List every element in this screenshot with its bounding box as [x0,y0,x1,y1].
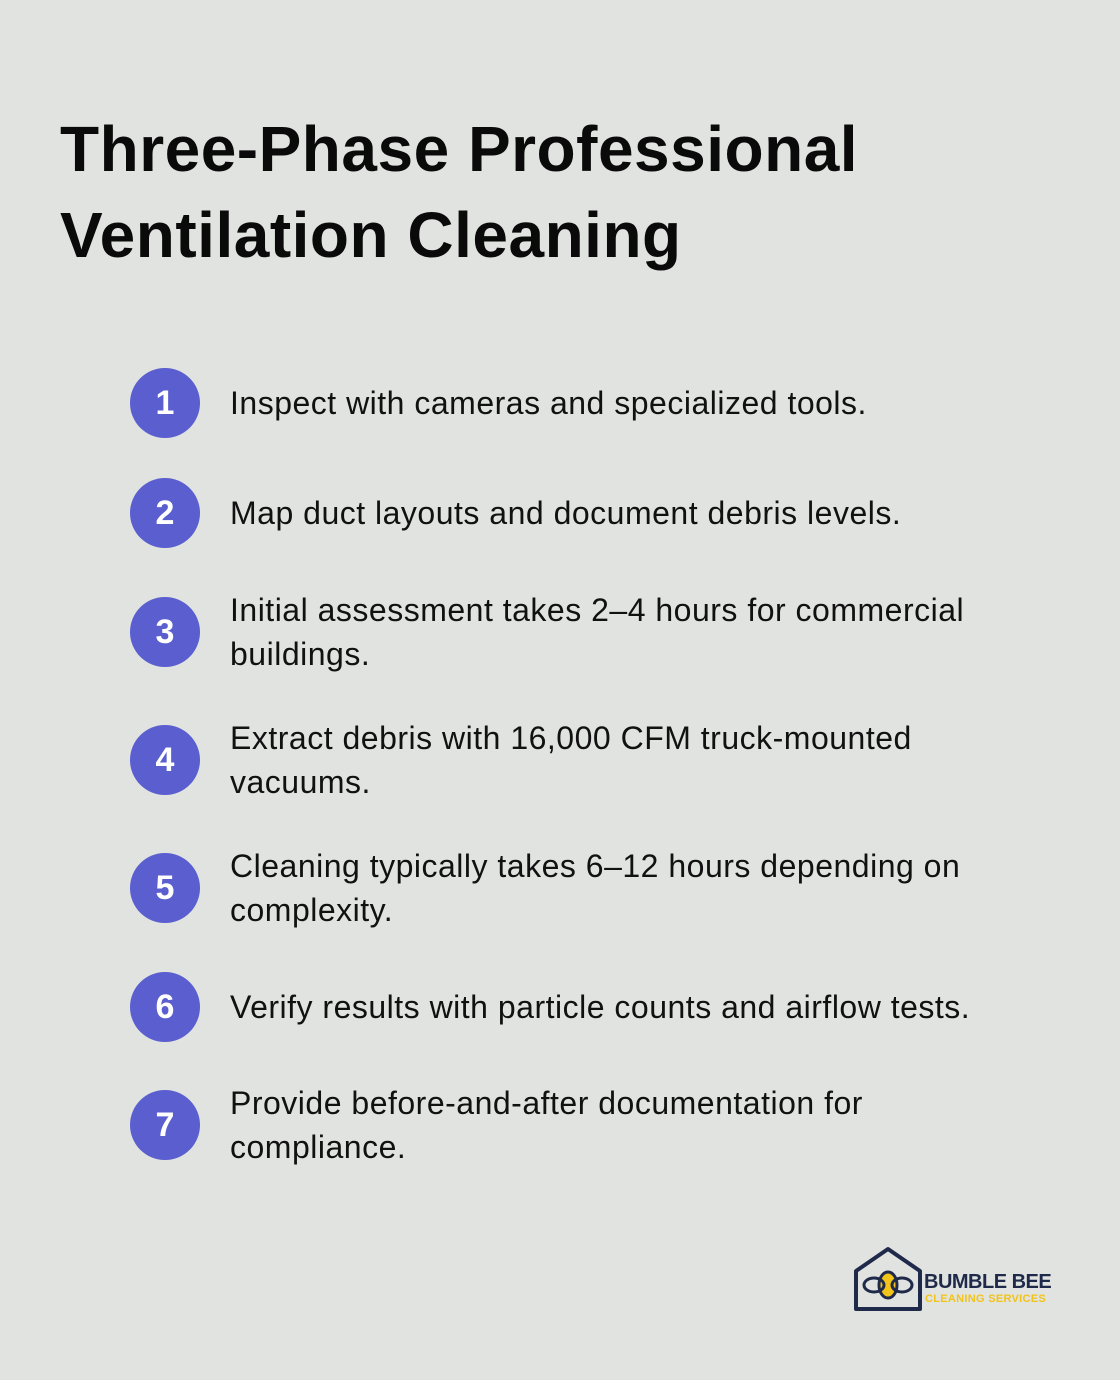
step 3: buildings. [230,636,370,672]
title: Three-Phase Professional [60,113,858,185]
step 3: Initial assessment takes 2–4 hours for commercial [230,592,964,628]
step 6: 6 [156,988,174,1026]
logo: CLEANING SERVICES [925,1293,1046,1305]
step 7: 7 [156,1106,174,1144]
step 4: Extract debris with 16,000 CFM truck-mounted [230,720,912,756]
step 4 [130,720,912,800]
step 7: compliance. [230,1129,406,1165]
step 3: 3 [156,613,174,651]
title: Ventilation Cleaning [60,199,682,271]
step 7: Provide before-and-after documentation for [230,1085,863,1121]
step 3 [130,592,964,672]
step 7 [130,1085,863,1165]
step 2 [130,478,901,548]
step 1: 1 [156,384,174,422]
logo: BUMBLE BEE [924,1271,1051,1293]
step 2: Map duct layouts and document debris levels. [230,495,901,531]
step 2: 2 [156,494,174,532]
step 5: 5 [156,869,174,907]
step 4: 4 [156,741,174,779]
step 5 [130,848,960,928]
step 1 [130,368,867,438]
step 5: complexity. [230,892,393,928]
step 6: Verify results with particle counts and airflow tests. [230,989,970,1025]
logo [854,1247,1051,1311]
step 6 [130,972,970,1042]
step 5: Cleaning typically takes 6–12 hours depending on [230,848,960,884]
step 4: vacuums. [230,764,371,800]
step 1: Inspect with cameras and specialized tools. [230,385,867,421]
title [60,113,858,271]
